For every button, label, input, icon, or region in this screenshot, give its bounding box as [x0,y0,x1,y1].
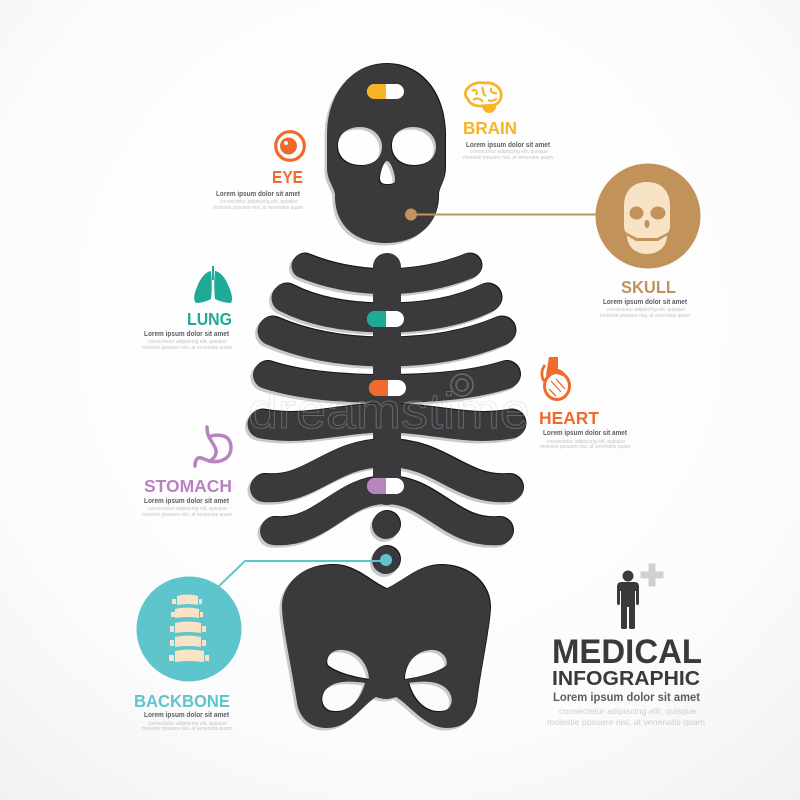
text block: skull [600,277,690,319]
text block: stomach: Lorem ipsum dolor sit amet [144,498,230,505]
text block: brain [463,118,553,161]
text block: stomach [142,476,232,518]
text block: stomach: consectetur adipiscing elit, quisque [148,506,227,512]
rib cage [260,253,512,534]
text block: backbone [134,691,232,732]
text block: heart: consectetur adipiscing elit, quisque [547,439,625,445]
text block: lung: LUNG [187,309,232,329]
connector: backbone [219,554,392,586]
text block: stomach: molestie posuere nisi, at venenatis quam [142,512,232,518]
skull silhouette [324,63,446,246]
text block: eye: Lorem ipsum dolor sit amet [216,191,301,198]
text block: brain: Lorem ipsum dolor sit amet [466,142,551,149]
icon: eye [276,132,304,160]
text block: title description: consectetur adipiscing elit, quisque [559,706,696,716]
text block: skull: molestie posuere nisi, at venenatis quam [600,313,690,319]
icon: lung [194,266,232,303]
vertebra ball upper [370,510,401,542]
text block: skull: consectetur adipiscing elit, quisque [607,307,685,313]
text block: title description: Lorem ipsum dolor sit amet [553,690,700,704]
text block: heart: molestie posuere nisi, at venenatis quam [540,444,630,450]
panel: skull badge [596,164,700,268]
text block: lung: consectetur adipiscing elit, quisque [148,339,227,345]
pill: brain [367,84,404,99]
pill: stomach [367,478,404,494]
text block: stomach: STOMACH [144,476,232,496]
vertebra ball lower [370,545,401,577]
text block: brain: BRAIN [463,118,517,138]
text block: lung [142,309,232,351]
text block: eye: EYE [272,167,303,187]
text block: heart: Lorem ipsum dolor sit amet [543,430,628,437]
icon: plus [641,564,663,586]
icon: heart [542,357,570,400]
text block: backbone: BACKBONE [134,691,230,711]
text block: backbone: Lorem ipsum dolor sit amet [144,712,230,719]
text block: backbone: consectetur adipiscing elit, quisque [148,721,227,727]
text block: brain: molestie posuere nisi, at venenatis quam [463,155,553,161]
icon: person [617,570,639,629]
text block: lung: molestie posuere nisi, at venenatis quam [142,345,232,351]
text block: eye: consectetur adipiscing elit, quisque [220,199,298,205]
panel: backbone badge [136,576,242,682]
title: MEDICAL [552,633,702,671]
pill: heart [369,380,406,396]
icon: stomach [195,427,231,466]
connector: skull [405,208,598,220]
title: INFOGRAPHIC [552,667,700,690]
text block: lung: Lorem ipsum dolor sit amet [144,331,230,338]
text block: heart: HEART [539,408,599,428]
text block: eye: molestie posuere nisi, at venenatis quam [213,205,303,211]
pelvis silhouette [280,564,491,730]
title [552,633,702,690]
text block: eye [213,167,303,211]
watermark: dreamstime [248,383,530,439]
icon: brain [465,83,501,113]
pill: lung [367,311,404,327]
text block: skull: Lorem ipsum dolor sit amet [603,299,688,306]
text block: brain: consectetur adipiscing elit, quisque [470,149,548,155]
text block: title description [547,690,705,727]
text block: title description: molestie posuere nisi, at venenatis quam [547,717,705,727]
icon: vertebrae [169,594,209,662]
text block: skull: SKULL [621,277,676,297]
text block: backbone: molestie posuere nisi, at venenatis quam [142,726,232,732]
icon: skull [624,182,670,254]
text block: heart [539,408,630,450]
